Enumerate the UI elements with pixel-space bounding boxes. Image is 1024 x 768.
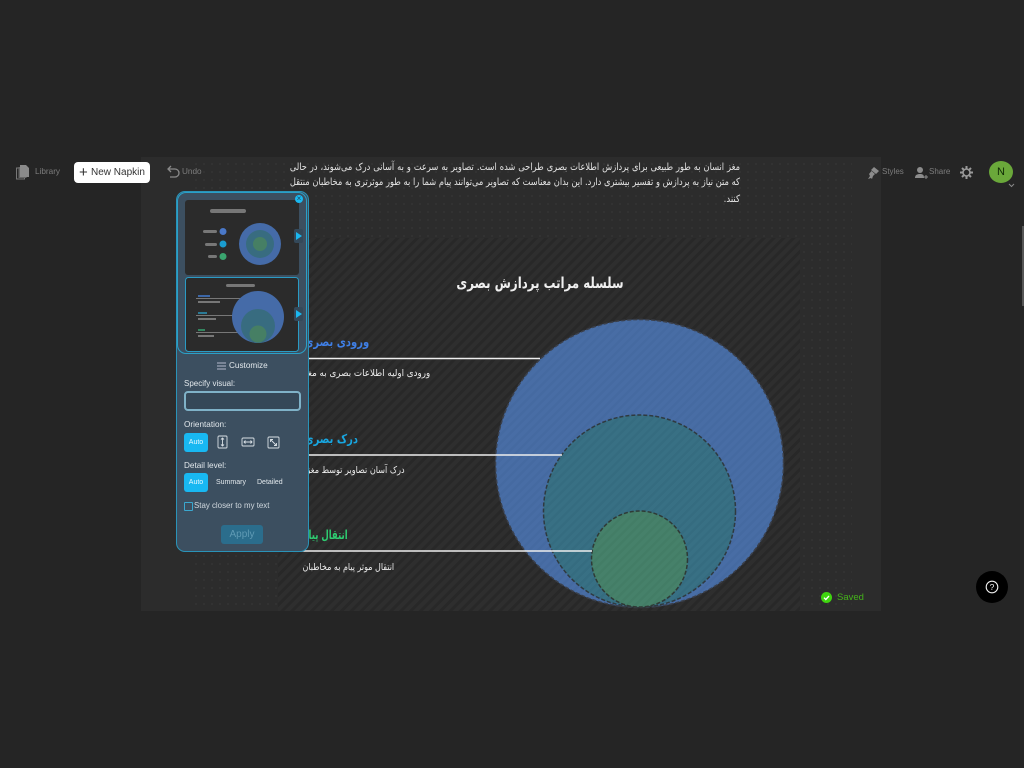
icon: avatar chevron (1008, 184, 1014, 188)
input: specify visual (184, 391, 300, 411)
intro text block: مغز انسان به طور طبیعی برای پردازش اطلاعات بصری طراحی شده است. تصاویر به سرعت و به آسانی درک می‌شوند، در حالی (290, 162, 740, 173)
checkbox: stay closer: Stay closer to my text (194, 501, 269, 510)
avatar: N (997, 166, 1005, 178)
intro text block (290, 160, 740, 205)
button: new napkin: + (79, 164, 88, 181)
intro text block: که متن نیاز به پردازش و تفسیر بیشتری دارد. این بدان معناست که تصاویر می‌توانند پیام شما را به طور موثرتری به مخاطبان منتقل (290, 177, 740, 188)
connector: visual perception (292, 454, 562, 456)
scrollbar (1022, 226, 1024, 306)
status: saved (821, 592, 864, 603)
button: close (295, 194, 303, 202)
button: preview arrow two (294, 307, 303, 321)
label: visual perception heading: درک بصری (304, 431, 358, 446)
button: close: × (297, 194, 301, 202)
toolbar: library: Library (35, 167, 60, 176)
button: detail auto: Auto (189, 479, 203, 486)
label: message transfer heading: انتقال پیام (303, 527, 348, 542)
label: message transfer description: انتقال موثر پیام به مخاطبان (302, 562, 394, 573)
nested circles (496, 320, 784, 608)
circle: message transfer (592, 511, 688, 607)
label: visual perception description: درک آسان تصاویر توسط مغز (307, 465, 405, 476)
circle: visual perception (544, 415, 736, 607)
status: saved: Saved (837, 592, 864, 603)
button: new napkin: New Napkin (91, 167, 145, 178)
dotted canvas area (190, 157, 852, 611)
label: specify visual: Specify visual: (184, 379, 235, 388)
toolbar: library (16, 165, 60, 180)
label: visual input heading: ورودی بصری (304, 334, 369, 349)
connector: message transfer (292, 550, 592, 552)
button: summary: Summary (216, 479, 246, 486)
hatched drawing area (278, 238, 800, 611)
avatar (989, 161, 1013, 183)
button: help (976, 571, 1008, 603)
button: detail auto (184, 473, 208, 492)
thumbnail: orbit layout (185, 200, 299, 275)
button: preview arrow one (294, 229, 303, 243)
diagram: nested circles with connector lines (300, 318, 784, 608)
toolbar: styles (868, 167, 904, 179)
label: detail level: Detail level: (184, 461, 226, 470)
toolbar: undo: Undo (182, 167, 202, 176)
toolbar: styles: Styles (882, 167, 904, 176)
panel: visual selector (176, 191, 309, 552)
toolbar: share (915, 167, 950, 179)
button: detailed: Detailed (257, 479, 283, 486)
toolbar: undo (167, 166, 202, 178)
intro text block: کنند. (724, 194, 740, 205)
button: help: ? (990, 582, 995, 592)
thumbnail: stacked circles selected (185, 277, 299, 352)
thumbnails frame (177, 192, 307, 354)
heading: customize: Customize (229, 361, 268, 370)
button: apply (221, 525, 263, 544)
connector: visual input (292, 358, 540, 360)
button: orientation auto (184, 433, 208, 452)
icon: settings gear (960, 166, 973, 179)
button: apply: Apply (229, 529, 254, 540)
label: visual input description: ورودی اولیه اطلاعات بصری به مغز (303, 368, 430, 379)
button: new napkin (74, 162, 150, 183)
canvas sheet (141, 157, 881, 611)
circle: visual input (496, 320, 784, 608)
diagram title: سلسله مراتب پردازش بصری (456, 274, 624, 292)
toolbar: share: Share (929, 167, 950, 176)
icon: orientation options (218, 436, 280, 448)
label: orientation: Orientation: (184, 420, 226, 429)
button: orientation auto: Auto (189, 439, 203, 446)
